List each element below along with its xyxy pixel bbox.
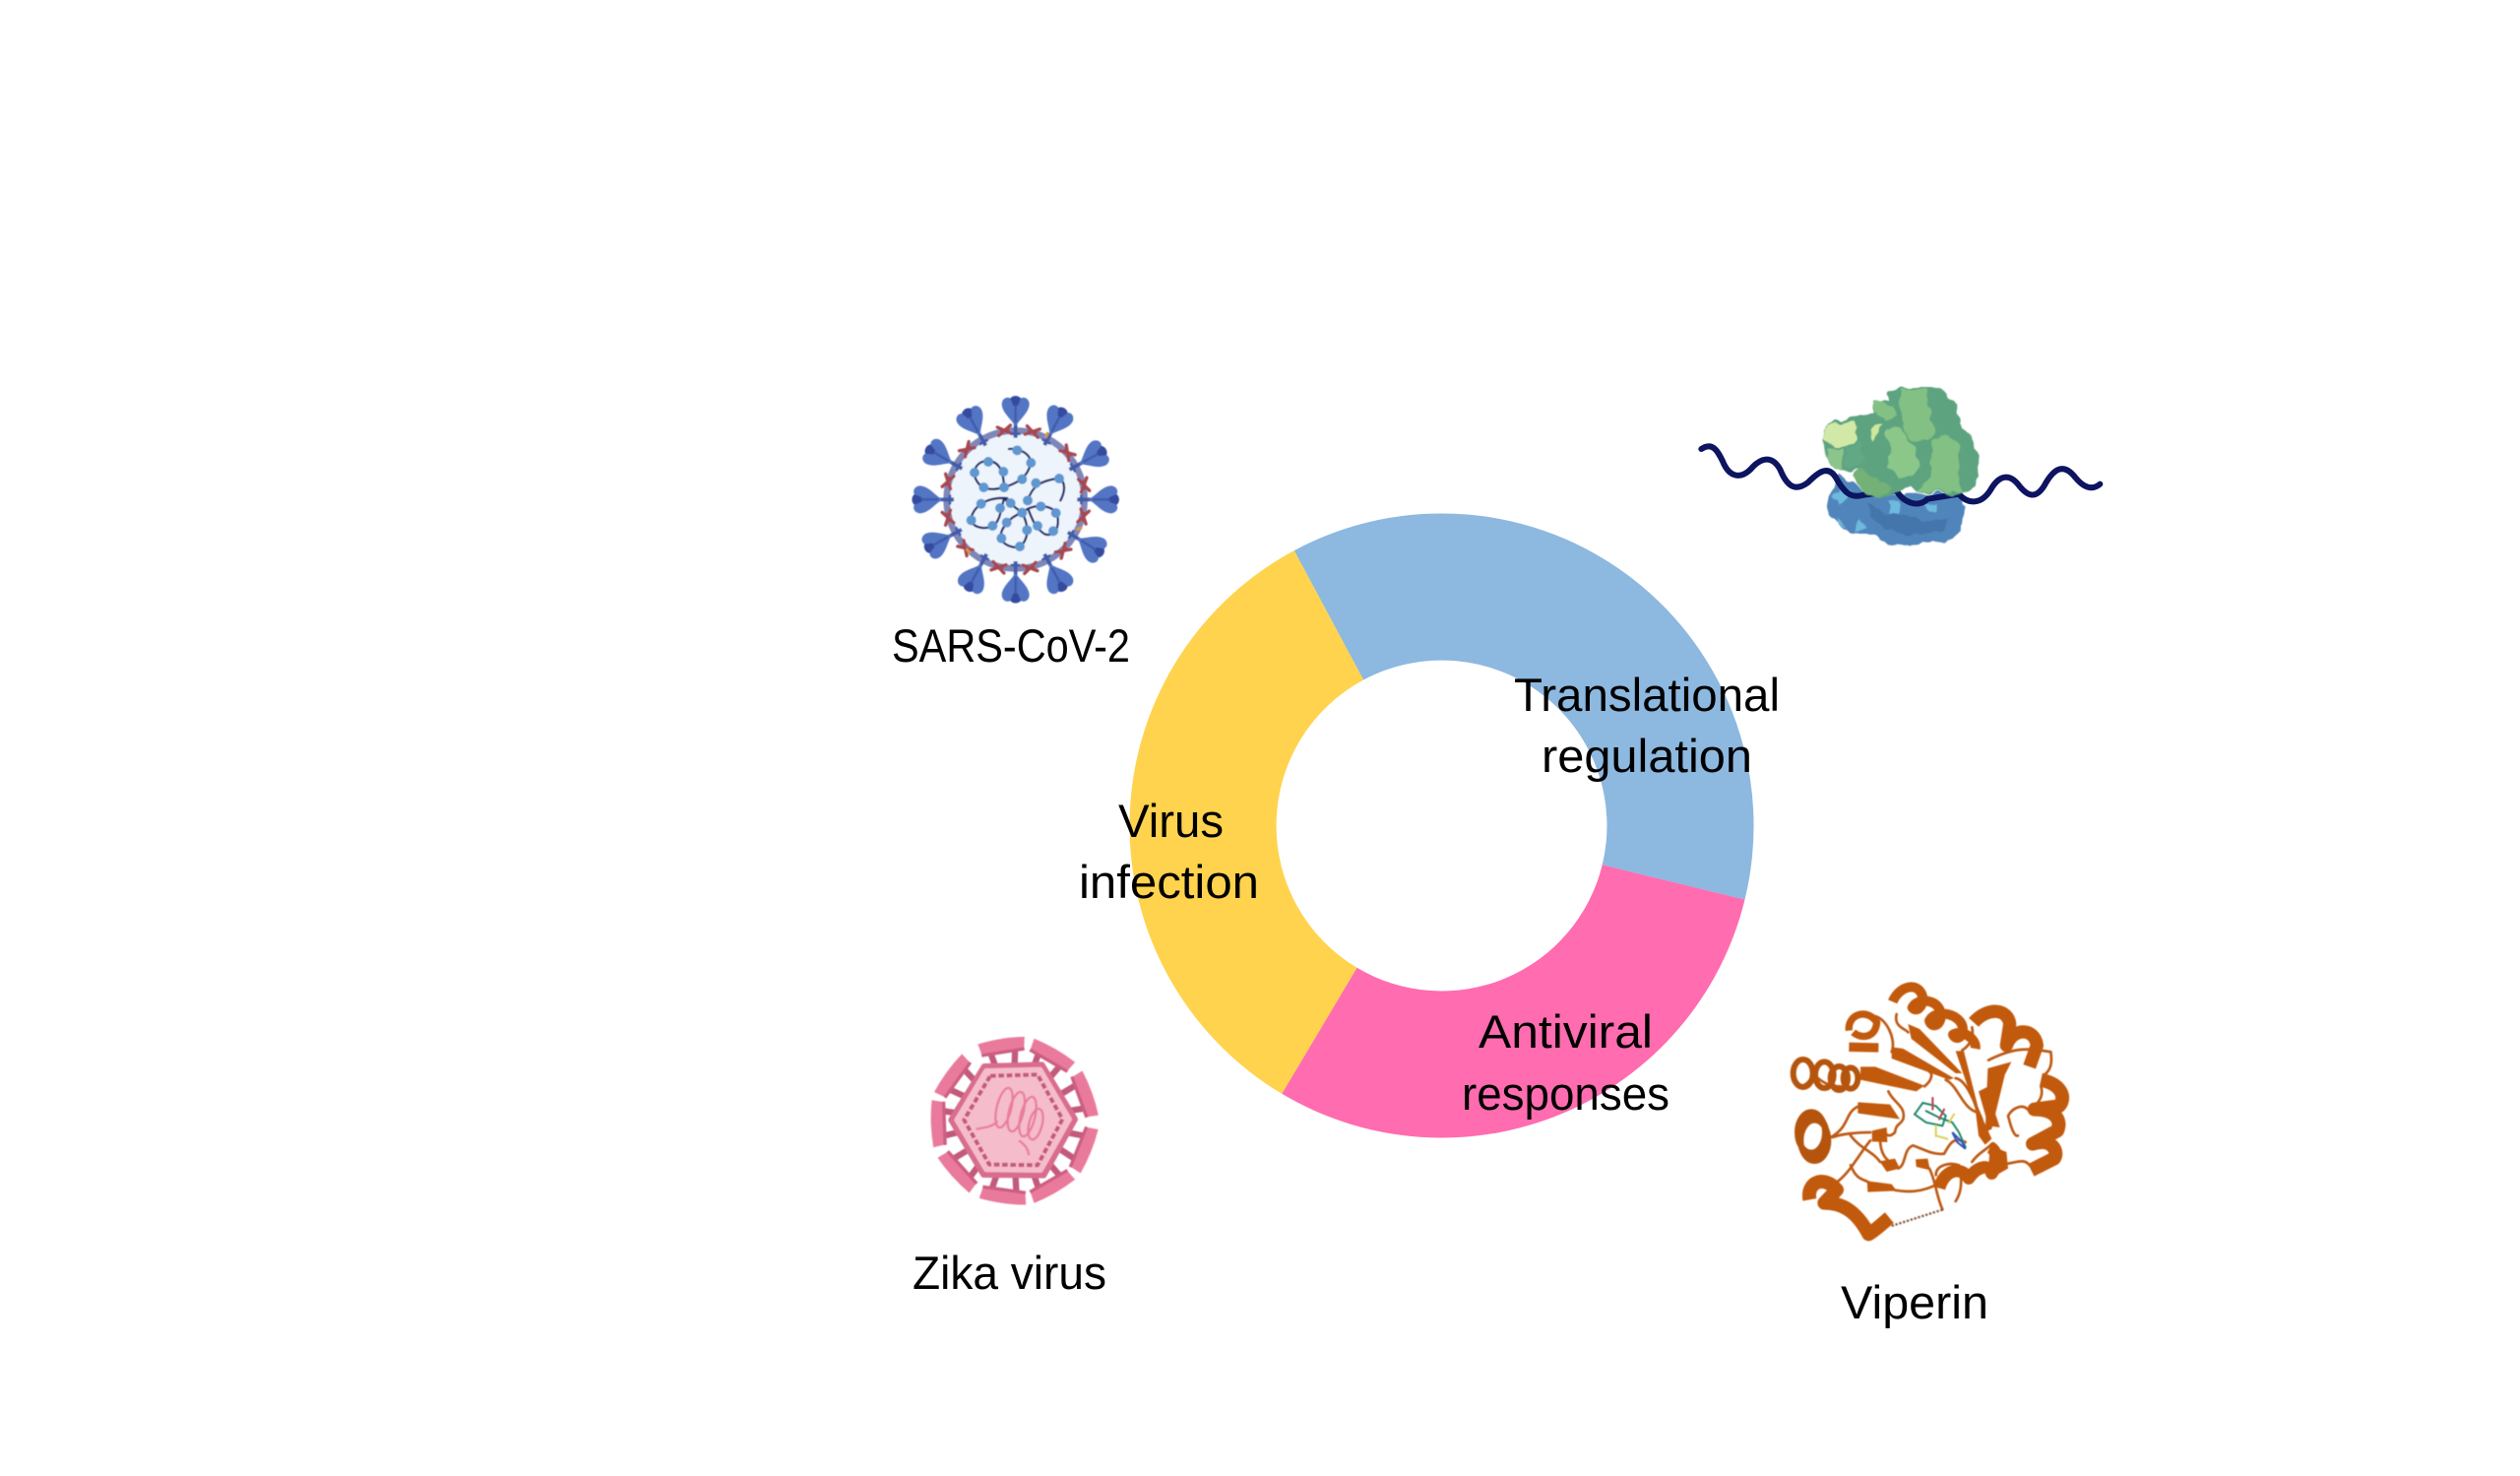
donut chart	[1079, 513, 1780, 1138]
label: translational regulation: Translational	[1514, 669, 1780, 721]
mRNA strand	[1701, 446, 2100, 504]
label: Zika virus: Zika virus	[913, 1247, 1106, 1299]
label: translational regulation	[1514, 669, 1780, 782]
icon: SARS-CoV-2 virion	[912, 396, 1119, 603]
label: virus infection: infection	[1079, 856, 1259, 908]
label: antiviral responses: responses	[1462, 1067, 1670, 1120]
icon: Zika virus	[930, 1035, 1100, 1206]
beta sheets	[1858, 1024, 2011, 1192]
label: antiviral responses	[1462, 1005, 1670, 1120]
thin loops	[1801, 1014, 2051, 1209]
ribosome small subunit	[1826, 475, 1962, 545]
label: antiviral responses: Antiviral	[1479, 1005, 1653, 1058]
segment: antiviral responses	[1282, 865, 1744, 1138]
label: SARS-CoV-2: SARS-CoV-2	[892, 619, 1130, 672]
label: virus infection: Virus	[1118, 795, 1224, 847]
unresolved region dotted line	[1892, 1209, 1943, 1226]
segment: translational regulation	[1294, 513, 1754, 900]
helices	[1809, 987, 2062, 1234]
segment: virus infection	[1129, 550, 1363, 1094]
ligand	[1915, 1098, 1966, 1149]
icon: ribosome on mRNA	[1701, 389, 2100, 545]
icon: viperin protein structure	[1794, 987, 2062, 1234]
label: Viperin: Viperin	[1841, 1276, 1988, 1328]
label: virus infection	[1079, 795, 1259, 908]
label: translational regulation: regulation	[1542, 730, 1752, 782]
ribosome large subunit	[1822, 389, 1979, 497]
